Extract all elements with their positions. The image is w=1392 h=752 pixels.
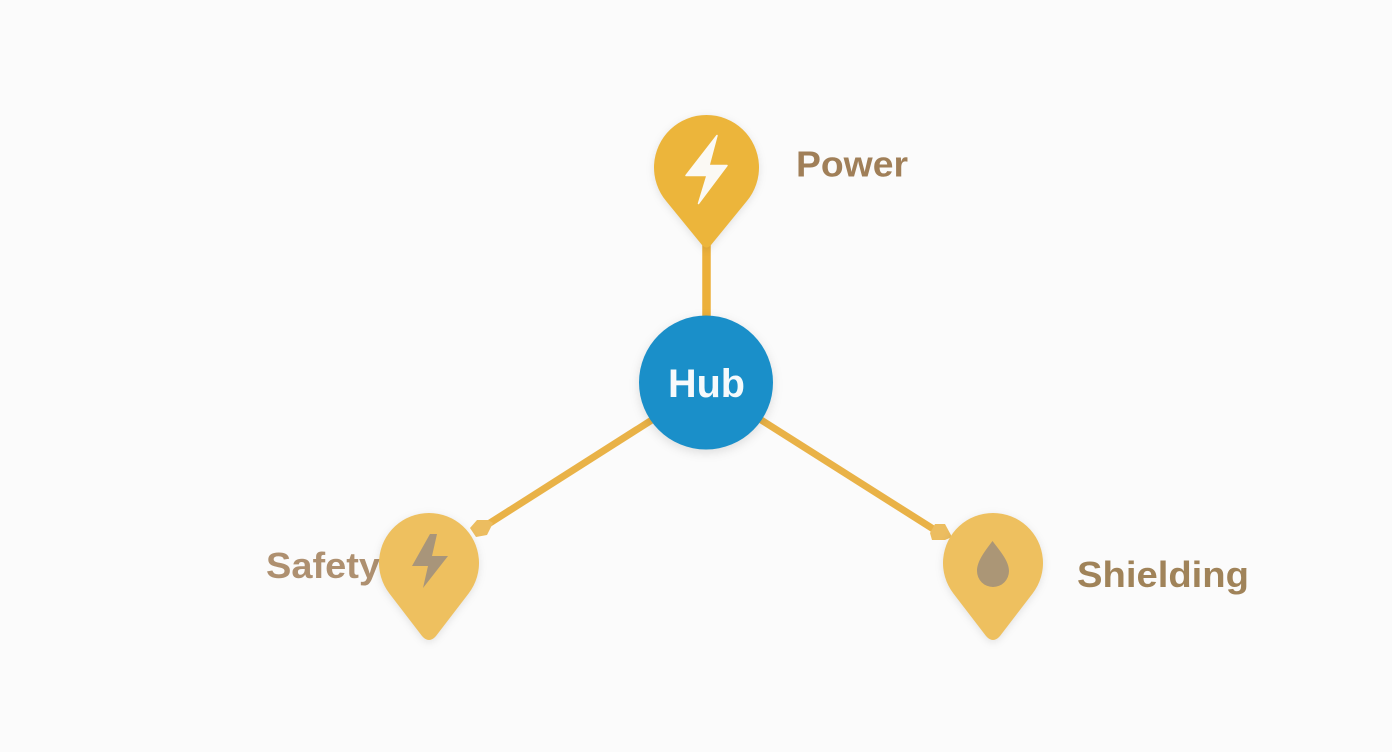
node: Power	[654, 115, 908, 248]
icon: white lightning bolt	[686, 136, 727, 204]
pin: Power	[654, 115, 759, 248]
connector: hub to Shielding	[758, 418, 952, 540]
hub circle	[639, 316, 773, 450]
connector: hub to Power	[702, 240, 711, 322]
node: Shielding	[943, 513, 1249, 640]
node: Safety	[266, 513, 479, 640]
label: Power: Power	[796, 144, 908, 184]
icon: water drop	[977, 541, 1009, 587]
pin: Safety	[379, 513, 479, 640]
icon: grey lightning bolt	[412, 534, 448, 588]
label: Hub: Hub	[668, 362, 745, 406]
connector: hub to Safety	[470, 418, 655, 537]
node: Hub	[639, 316, 773, 450]
pin: Shielding	[943, 513, 1043, 640]
label: Shielding: Shielding	[1077, 554, 1249, 595]
label: Safety: Safety	[266, 545, 380, 586]
